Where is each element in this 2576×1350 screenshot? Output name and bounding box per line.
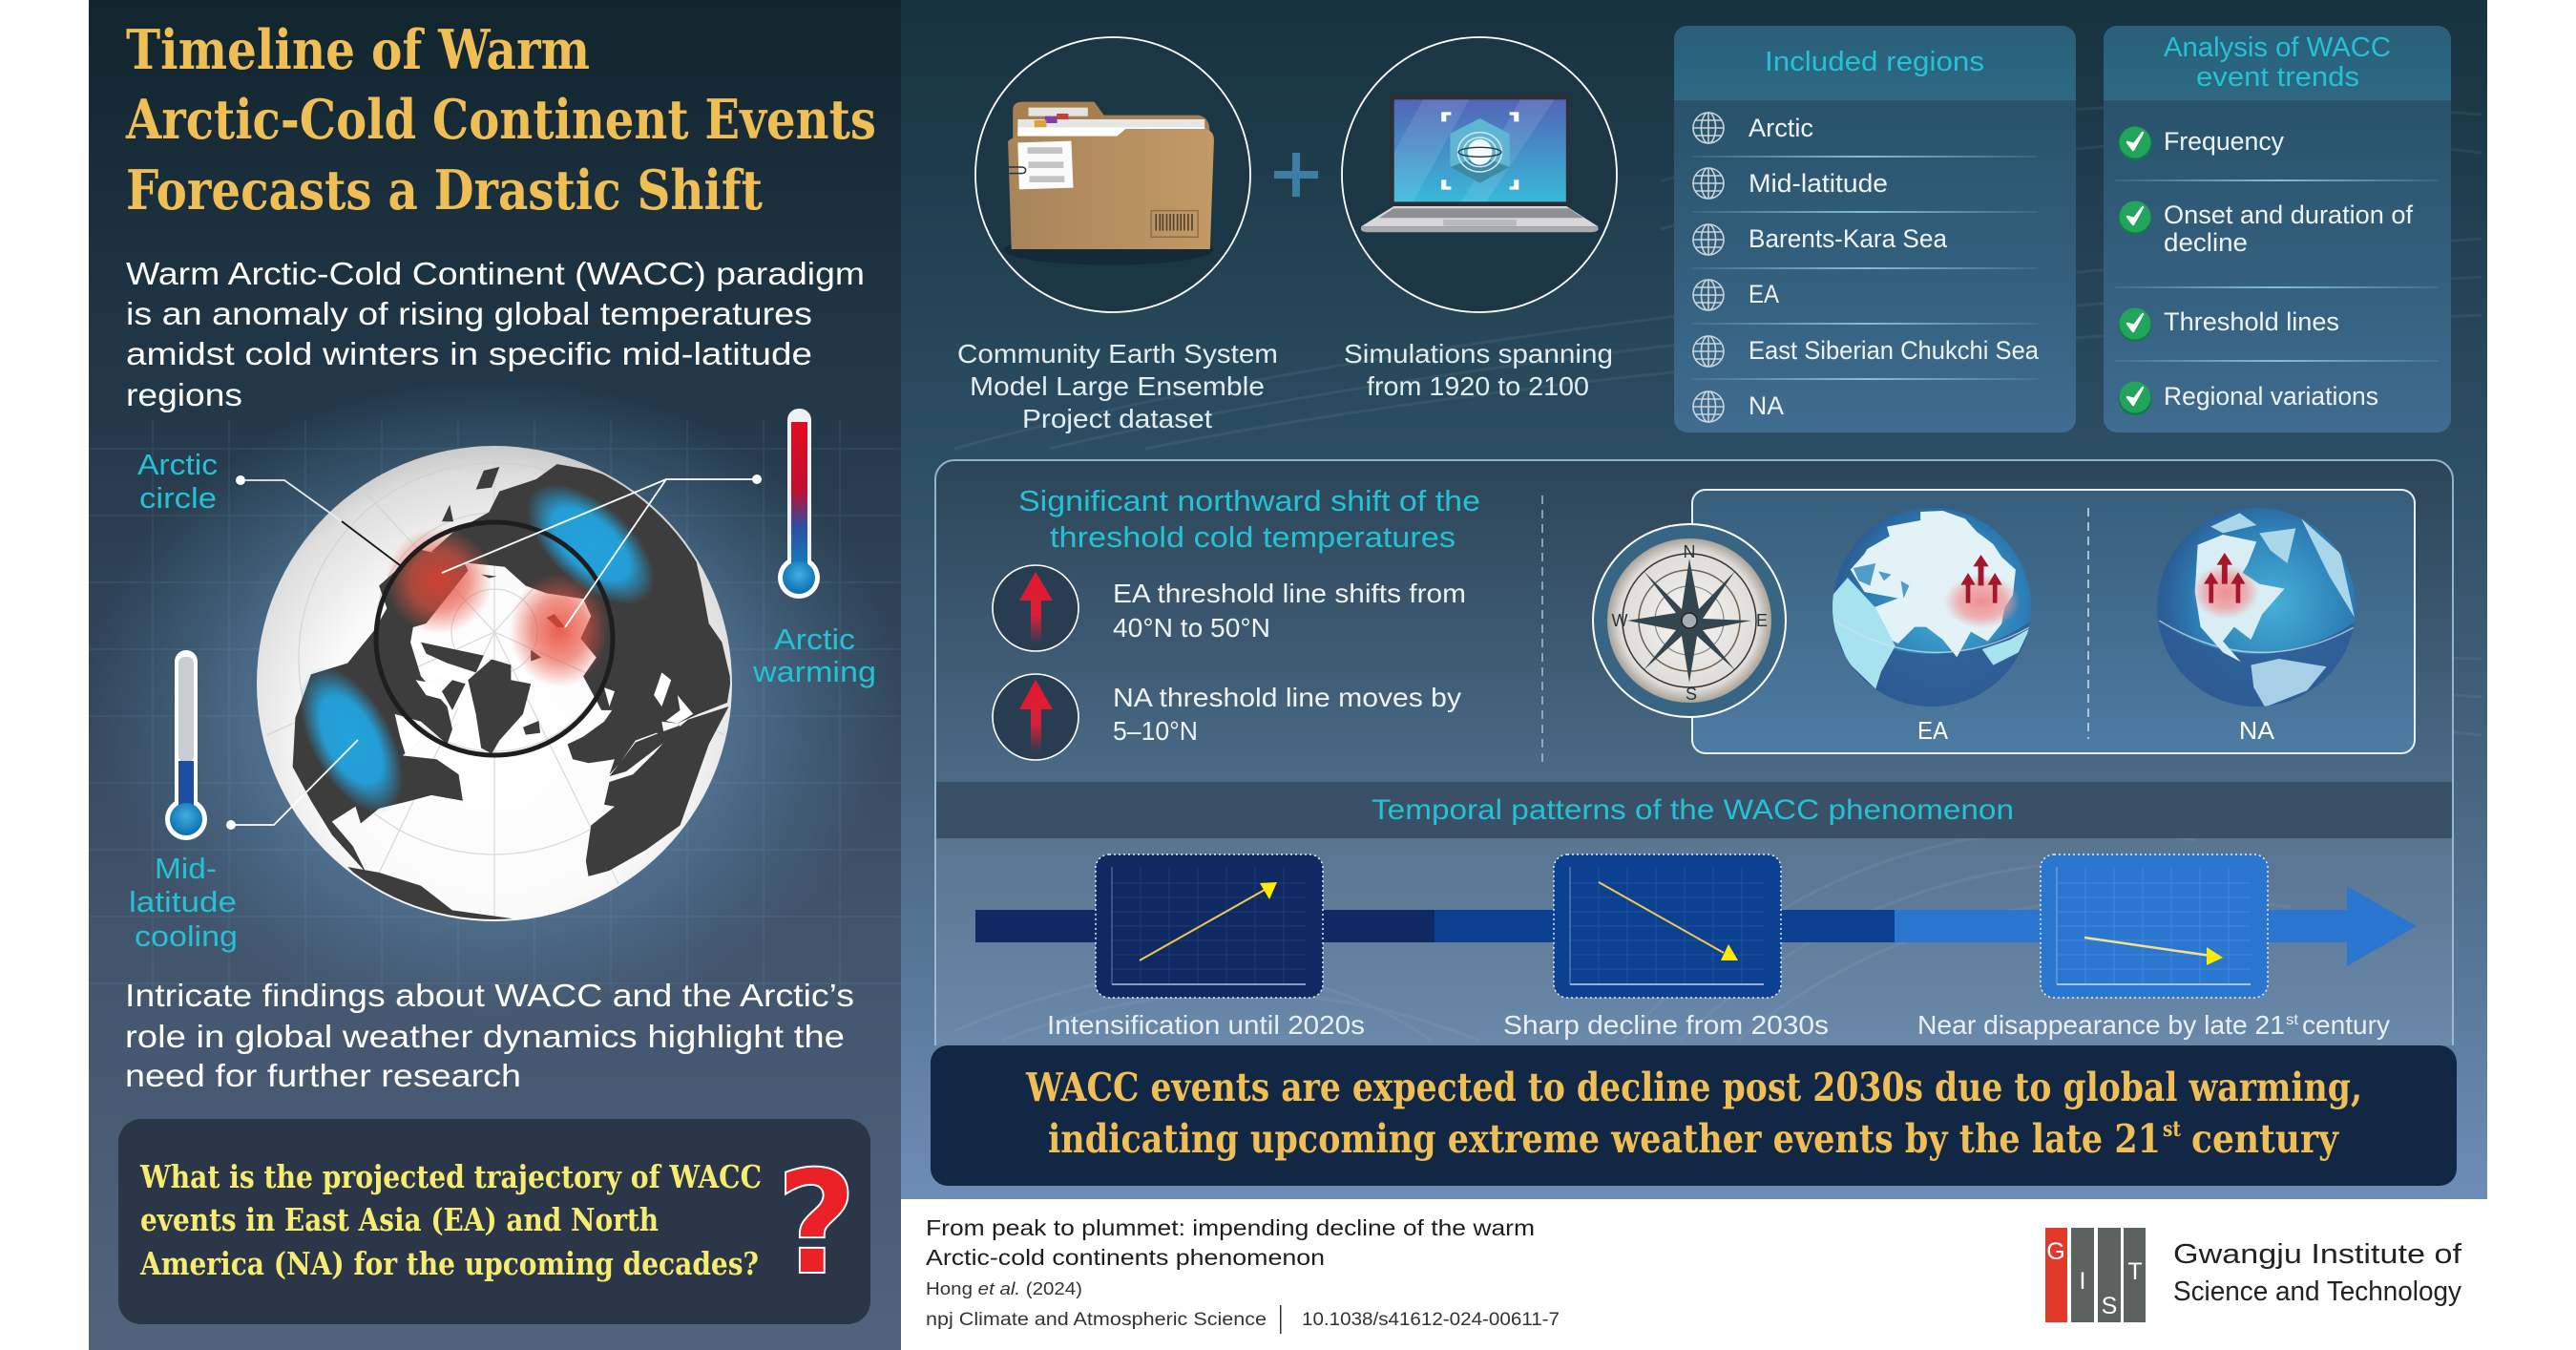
text block: NA threshold: 5–10°N — [1113, 716, 1198, 746]
text block: dataset caption — [957, 339, 1278, 433]
text block: WACC paradigm intro — [126, 256, 865, 412]
callout: research question: events in East Asia (EA) and North — [140, 1201, 659, 1238]
text block: further research — [125, 978, 854, 1093]
footer: citation — [926, 1215, 1560, 1334]
callout: research question: What is the projected trajectory of WACC — [139, 1158, 762, 1195]
icon: compass — [1593, 524, 1786, 717]
label: Mid-latitude cooling: Mid- — [155, 852, 217, 885]
map: North America — [293, 550, 468, 873]
text block: WACC paradigm intro: amidst cold winters in specific mid-latitude — [126, 336, 812, 371]
Arctic circle ring — [376, 522, 613, 755]
globe with Arctic map — [257, 446, 732, 925]
text block: WACC paradigm intro: regions — [126, 377, 242, 412]
glow behind globe — [89, 377, 900, 1026]
icon: compass: W — [1611, 611, 1628, 630]
label: Arctic warming: Arctic — [774, 622, 855, 656]
map: South America — [347, 867, 513, 919]
logo: GIST: Science and Technology — [2173, 1276, 2461, 1307]
text block: WACC paradigm intro: is an anomaly of rising global temperatures — [126, 296, 812, 331]
title: Forecasts a Drastic Shift — [126, 158, 764, 222]
text block: dataset caption: Community Earth System — [957, 339, 1278, 369]
label: Mid-latitude cooling — [129, 852, 238, 953]
list: region names — [1749, 114, 2040, 420]
callout: conclusion banner: WACC events are expected to decline post 2030s due to global warming, — [1025, 1065, 2362, 1110]
icon: folder in circle — [975, 37, 1250, 312]
text block: EA threshold: EA threshold line shifts from — [1113, 579, 1466, 608]
footer: citation: Arctic-cold continents phenomenon — [926, 1245, 1325, 1270]
map: Arctic archipelago — [421, 643, 484, 710]
labels: temporal phases: century — [2302, 1010, 2390, 1040]
panel: analysis of WACC event trends: event trends — [2196, 62, 2359, 93]
text block: further research: role in global weather dynamics highlight the — [125, 1019, 845, 1054]
labels: temporal phases: Sharp decline from 2030s — [1503, 1010, 1829, 1040]
thermometer: Arctic warming — [778, 409, 820, 599]
footer: citation: From peak to plummet: impending decline of the warm — [926, 1215, 1535, 1240]
icon: compass: N — [1684, 542, 1695, 561]
text block: simulation caption: Simulations spanning — [1344, 339, 1613, 369]
text block: WACC paradigm intro: Warm Arctic-Cold Continent (WACC) paradigm — [126, 256, 865, 291]
logo: GIST: Gwangju Institute of — [2173, 1239, 2462, 1270]
text block: simulation caption: from 1920 to 2100 — [1367, 371, 1589, 401]
text block: EA threshold: 40°N to 50°N — [1113, 613, 1270, 643]
list: analysis items: Threshold lines — [2164, 307, 2339, 336]
labels: temporal phases: st — [2286, 1012, 2299, 1028]
callout: research question — [118, 1119, 870, 1324]
label: Arctic circle — [137, 448, 218, 515]
footer: citation: npj Climate and Atmospheric Science — [926, 1310, 1267, 1330]
map: Arctic islands and seas cut-outs — [400, 663, 693, 753]
callout: conclusion banner: century — [2191, 1116, 2339, 1162]
leader line: Arctic warming — [442, 475, 762, 627]
list: region names: EA — [1749, 280, 1779, 308]
map: Greenland — [468, 660, 531, 753]
icon: NA up arrow — [993, 674, 1079, 760]
band: temporal patterns heading — [936, 782, 2452, 838]
callout: conclusion banner: st — [2163, 1117, 2182, 1142]
title: Timeline of Warm — [126, 18, 590, 82]
panel: analysis of WACC event trends: Analysis of WACC — [2164, 32, 2391, 63]
label: NA: NA — [2239, 716, 2275, 745]
text block: dataset caption: Model Large Ensemble — [970, 371, 1265, 401]
list: region names: Barents-Kara Sea — [1749, 224, 1948, 253]
icon: check marks — [2119, 126, 2151, 415]
panel: left column — [89, 0, 901, 1350]
icon: plus sign — [1274, 153, 1318, 197]
icon: globes — [1693, 113, 1724, 422]
list: region names: Arctic — [1749, 114, 1813, 142]
list: region names: Mid-latitude — [1749, 169, 1888, 198]
timeline arrow — [975, 886, 2417, 966]
list: analysis items: Frequency — [2164, 127, 2284, 156]
icon: compass: E — [1756, 611, 1768, 630]
title: Arctic-Cold Continent Events — [125, 88, 876, 152]
labels: temporal phases: Intensification until 2020s — [1047, 1010, 1365, 1040]
callout: research question: America (NA) for the upcoming decades? — [139, 1245, 759, 1282]
heading: northward shift: Significant northward shift of the — [1018, 484, 1480, 517]
title — [125, 18, 876, 222]
heading: northward shift: threshold cold temperatures — [1050, 520, 1456, 554]
list: analysis items: Onset and duration of — [2164, 200, 2413, 229]
map: Africa and Middle East — [586, 707, 729, 876]
map: Svalbard, Iceland, Novaya Zemlya — [442, 467, 565, 735]
globe: North America — [2156, 508, 2357, 713]
list: region names: NA — [1749, 391, 1784, 420]
list: analysis items: Regional variations — [2164, 382, 2378, 411]
cold anomaly: East Asia — [529, 485, 653, 603]
band: temporal patterns heading: Temporal patterns of the WACC phenomenon — [1372, 794, 2014, 826]
chart: near disappearance — [2041, 854, 2268, 998]
globe: East Asia — [1831, 508, 2033, 713]
logo: GIST: T — [2127, 1258, 2143, 1285]
icon: compass: S — [1686, 685, 1697, 704]
icon: EA up arrow — [993, 565, 1079, 651]
footer: citation: Hong et al. (2024) — [926, 1279, 1082, 1298]
text block: further research: need for further research — [125, 1058, 521, 1093]
text block: NA threshold: NA threshold line moves by — [1113, 683, 1461, 712]
label: EA: EA — [1917, 716, 1949, 745]
logo: GIST: I — [2080, 1268, 2085, 1295]
warm anomaly: Alaska-Chukchi — [386, 527, 492, 634]
label: Arctic warming — [752, 622, 876, 688]
leader line: Arctic circle — [236, 475, 400, 565]
logo: GIST — [2045, 1228, 2462, 1322]
list: analysis items — [2164, 127, 2413, 411]
callout: conclusion banner: indicating upcoming extreme weather events by the late 21 — [1048, 1116, 2161, 1162]
label: Arctic warming: warming — [752, 655, 876, 688]
label: Arctic circle: circle — [139, 481, 217, 515]
text block: dataset caption: Project dataset — [1022, 404, 1212, 433]
thermometer: mid-latitude cooling — [165, 650, 207, 840]
chart: sharp decline — [1554, 854, 1781, 998]
footer: citation: 10.1038/s41612-024-00611-7 — [1302, 1310, 1560, 1330]
text block: NA threshold — [1113, 683, 1461, 746]
chart: intensification — [1096, 854, 1323, 998]
icon: question mark: ? — [776, 1141, 857, 1307]
label: Mid-latitude cooling: cooling — [135, 919, 238, 953]
heading: northward shift — [1018, 484, 1480, 554]
logo: GIST: G — [2046, 1238, 2065, 1265]
map: southern Europe — [610, 726, 681, 776]
labels: temporal phases — [1047, 1010, 2390, 1040]
warm anomaly: Barents-Kara — [510, 573, 609, 687]
callout: conclusion banner — [931, 1045, 2457, 1186]
panel: analysis of WACC event trends — [2104, 26, 2451, 432]
panel: right main area — [901, 0, 2487, 1199]
panel: included regions — [1674, 26, 2076, 432]
list: analysis items: decline — [2164, 228, 2248, 257]
label: Mid-latitude cooling: latitude — [129, 885, 237, 918]
text block: simulation caption — [1344, 339, 1613, 401]
cold anomaly: North America — [301, 668, 402, 812]
labels: temporal phases: Near disappearance by late 21 — [1917, 1010, 2285, 1040]
text block: EA threshold — [1113, 579, 1466, 643]
list: region names: East Siberian Chukchi Sea — [1749, 336, 2040, 365]
leader line: mid-latitude cooling — [226, 740, 358, 830]
map: Eurasia — [431, 464, 731, 774]
panel: EA and NA globes — [1692, 490, 2415, 753]
text block: further research: Intricate findings about WACC and the Arctic’s — [125, 978, 854, 1013]
logo: GIST: S — [2102, 1293, 2117, 1319]
panel: included regions: Included regions — [1765, 47, 1984, 77]
label: Arctic circle: Arctic — [137, 448, 218, 481]
icon: laptop in circle — [1342, 37, 1617, 312]
panel: threshold shift and temporal patterns frame — [935, 460, 2453, 1045]
